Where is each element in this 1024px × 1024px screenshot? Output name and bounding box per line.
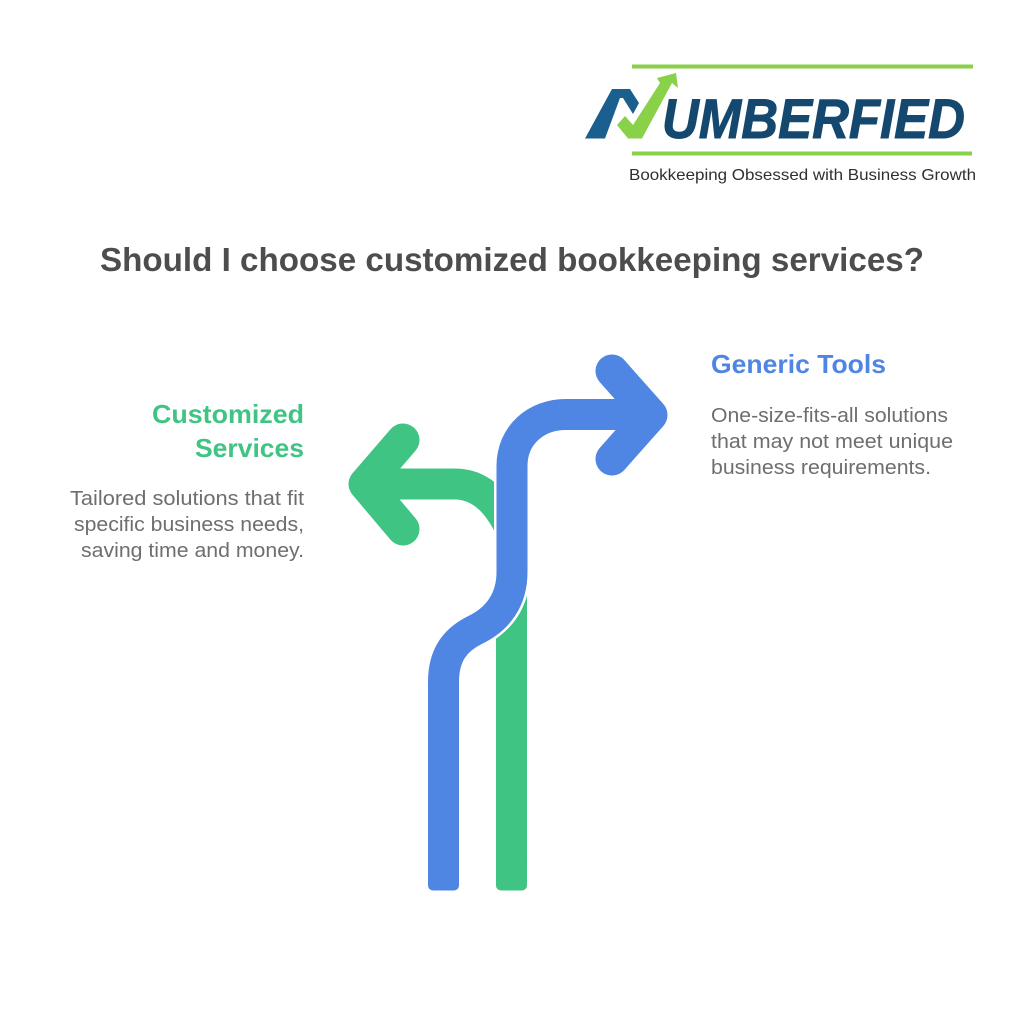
panel: generic tools text <box>711 349 953 479</box>
description: customized services: specific business needs, <box>74 514 304 536</box>
description: customized services <box>70 488 304 562</box>
heading: customized services <box>152 399 304 463</box>
diagram: diverging arrows <box>365 371 651 890</box>
panel: customized services text <box>70 399 304 562</box>
heading: generic tools: Generic Tools <box>711 349 886 379</box>
logo wordmark: UMBERFIED <box>662 87 965 150</box>
description: generic tools <box>711 405 953 479</box>
logo: Numberfied <box>585 64 976 184</box>
arrow: green left path <box>365 440 527 890</box>
description: customized services: Tailored solutions that fit <box>70 488 304 510</box>
description: generic tools: One-size-fits-all solutions <box>711 405 948 427</box>
logo tagline: Bookkeeping Obsessed with Business Growth <box>629 167 976 184</box>
logo mark: green growth arrow <box>617 73 678 138</box>
description: generic tools: that may not meet unique <box>711 431 953 453</box>
logo mark: blue N stroke <box>585 89 639 138</box>
heading: customized services: Services <box>195 433 304 463</box>
description: customized services: saving time and money. <box>81 540 304 562</box>
arrow: blue right path <box>428 371 651 890</box>
description: generic tools: business requirements. <box>711 457 931 479</box>
heading: customized services: Customized <box>152 399 304 429</box>
title: Should I choose customized bookkeeping services? <box>100 242 924 279</box>
